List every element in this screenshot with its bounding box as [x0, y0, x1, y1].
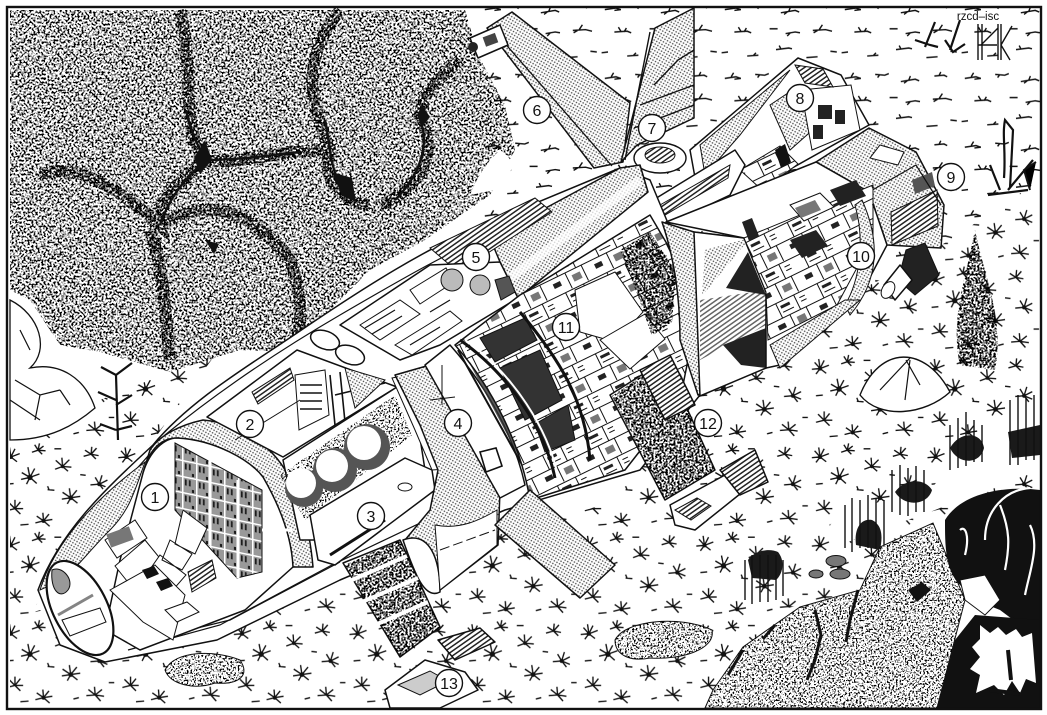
callout 2: 2 [246, 417, 255, 434]
section 11 mid bay with dark windows [455, 215, 700, 500]
seats and console [105, 520, 163, 586]
callout 5 [462, 244, 490, 270]
center ramp [495, 490, 615, 598]
vents [430, 198, 552, 272]
callout 6: 6 [533, 103, 542, 120]
ring hatch [634, 143, 686, 173]
ground: dense vegetation [10, 180, 1040, 708]
signature [957, 11, 1012, 60]
plant near hull [98, 363, 132, 440]
callout 3: 3 [367, 509, 376, 526]
leaves left of hull [10, 300, 95, 440]
dark grass clump [745, 550, 783, 604]
engine pod on wing [470, 25, 508, 58]
callout 7: 7 [648, 121, 657, 138]
tail fin 7 [621, 8, 694, 173]
rear upper hull: section 8 [690, 58, 869, 205]
callout 13 [436, 670, 462, 696]
rear hull section 9 [816, 128, 944, 248]
callout 11: 11 [558, 320, 574, 337]
wing 6 with engine [468, 12, 630, 168]
callout 8: 8 [796, 91, 805, 108]
callout 10 [848, 242, 874, 270]
callout 9: 9 [947, 170, 956, 187]
rock shadow bands [40, 10, 460, 360]
white tube [403, 538, 440, 593]
ground: sparse grass upper right [480, 8, 1040, 308]
dorsal hull plate with vents [430, 165, 648, 298]
lower right ramp 12 [610, 355, 768, 530]
bulkhead arch [143, 420, 313, 567]
dark stream reeds [830, 395, 1040, 552]
callout 7 [638, 114, 666, 142]
wall shelves [175, 443, 262, 578]
callout 13: 13 [440, 676, 458, 693]
central spine with slot [645, 150, 745, 228]
rear engine bay section 10 [666, 162, 887, 368]
callout 12: 12 [699, 416, 717, 433]
lower left ramp [343, 540, 440, 657]
main hull silhouette [38, 168, 700, 662]
callout 4: 4 [454, 416, 463, 433]
section 2 upper room [207, 350, 397, 457]
rear thruster [878, 243, 939, 301]
rear bulkhead with dark triangles [662, 222, 766, 396]
callout 4 [444, 410, 472, 436]
callout 6 [524, 96, 550, 124]
callout 3 [358, 502, 384, 530]
callout 12 [694, 410, 722, 436]
callout 8 [786, 84, 814, 112]
callout 1 [142, 484, 168, 510]
spheres [344, 424, 390, 470]
callout 5: 5 [472, 250, 481, 267]
small grass plants near signature [915, 20, 965, 52]
callout 1: 1 [151, 490, 160, 507]
section 1 cockpit [105, 420, 313, 650]
console [310, 458, 435, 565]
ground: left vegetation [10, 355, 215, 640]
section 4 room [425, 345, 528, 498]
section 3 spheres and console [280, 373, 462, 565]
rock cracks [160, 110, 424, 225]
section 5 equipment bay [340, 262, 518, 360]
stippled rock lower right [705, 523, 965, 708]
leafy plant center right [860, 357, 950, 412]
windshield nose ring [33, 550, 127, 666]
callout 11 [552, 314, 580, 340]
hatch pods [308, 326, 367, 369]
rock formation upper left [10, 10, 515, 372]
tall plant right [957, 120, 1036, 370]
small stippled rocks [165, 150, 712, 686]
figure in foreground, dark hair [937, 488, 1040, 708]
nose gray shell [40, 462, 145, 590]
cargo boxes [385, 628, 495, 708]
gray mid hull band [395, 365, 500, 593]
signature: rzcd–isc [957, 11, 999, 23]
callout 10: 10 [852, 249, 870, 266]
pebbles [809, 556, 850, 579]
callout 9 [938, 164, 964, 190]
cockpit floor and interior [105, 438, 293, 650]
callout 2 [236, 410, 264, 438]
